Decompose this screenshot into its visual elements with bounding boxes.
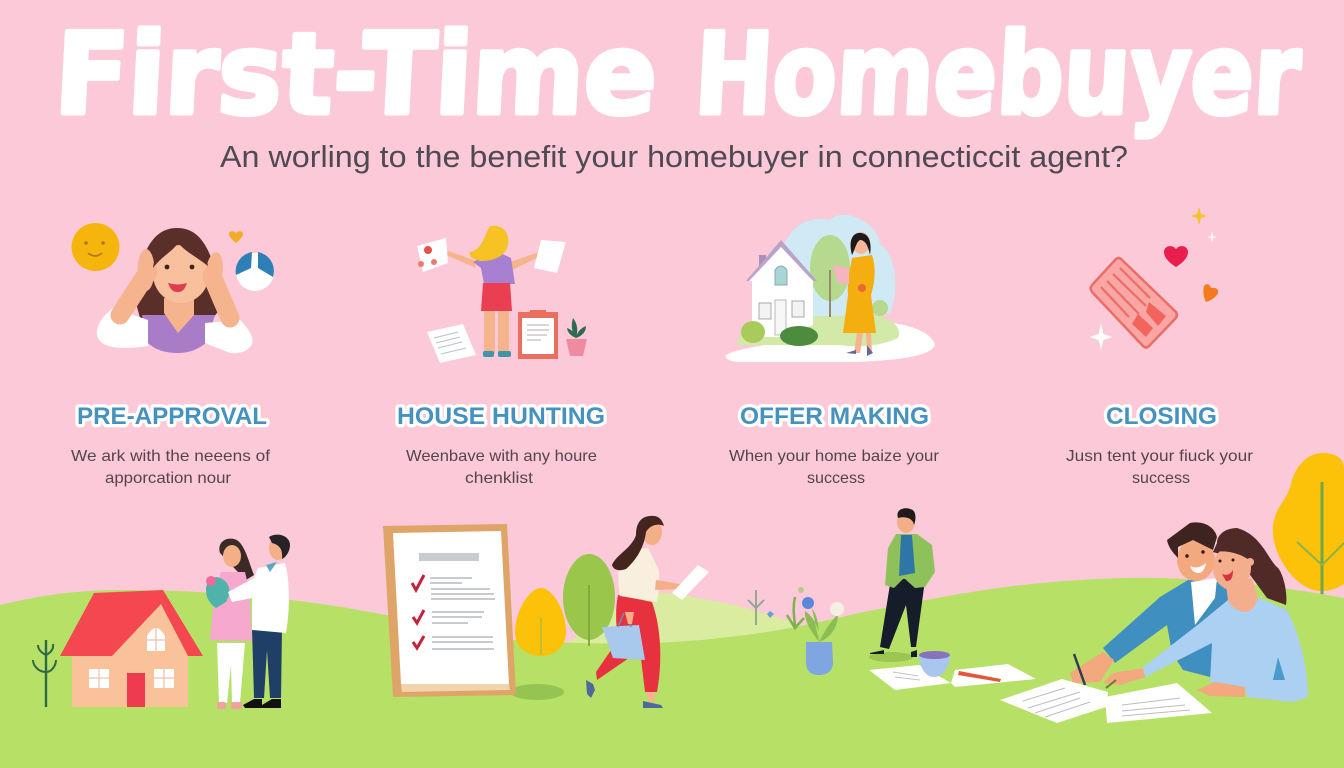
icon: red heart: [1164, 246, 1188, 267]
heading: house hunting: HOUSE HUNTING: [397, 403, 605, 430]
man: [1070, 522, 1233, 683]
text: pre-approval body: We ark with the neeens of: [71, 448, 271, 465]
icon: heart: [229, 231, 243, 243]
scene: standing man: [869, 508, 935, 662]
scene: couple with baby: [206, 535, 290, 709]
text: house hunting body: [406, 448, 597, 487]
text: offer making body: When your home baize your: [729, 448, 940, 465]
text: closing body: [1066, 448, 1254, 487]
scene: house: [33, 590, 203, 707]
illustration: woman and house: [726, 215, 935, 362]
panel: offer making: [726, 215, 940, 487]
heading: pre-approval: PRE-APPROVAL: [77, 403, 267, 430]
background: green ground: [0, 578, 1344, 768]
illustration: happy woman: [97, 228, 253, 353]
text: house hunting body: chenklist: [465, 470, 534, 487]
checklist lines: [430, 578, 495, 649]
text: house hunting body: Weenbave with any houre: [406, 448, 597, 465]
title: [52, 10, 1303, 140]
text: offer making body: [729, 448, 940, 487]
paper: held: [672, 565, 709, 600]
text: closing body: success: [1132, 470, 1190, 487]
panel: closing: [1066, 207, 1254, 487]
scene: table papers and bowl: [869, 651, 1036, 690]
icon: pie chart: [236, 252, 274, 291]
scene: walking woman: [586, 516, 709, 708]
pen: [1074, 654, 1085, 685]
heading: offer making: OFFER MAKING: [740, 403, 929, 430]
icon: gold sparkle: [1191, 207, 1207, 225]
big yellow tree: [1273, 453, 1344, 610]
plant: [566, 318, 587, 356]
text: offer making body: success: [807, 470, 865, 487]
text: pre-approval body: apporcation nour: [105, 470, 232, 487]
text: closing body: Jusn tent your fiuck your: [1066, 448, 1254, 465]
panel: pre-approval: [71, 223, 274, 487]
background: light hill: [560, 593, 800, 660]
scene: signing couple: [1000, 522, 1308, 723]
scene: checklist board: [383, 524, 564, 700]
title: First-Time: [52, 10, 660, 140]
icon: smiley: [72, 223, 120, 271]
paper: left: [1000, 679, 1108, 723]
panel: house hunting: [397, 226, 605, 487]
subtitle: An worling to the benefit your homebuyer in connecticcit agent?: [220, 139, 1128, 174]
icon: small white sparkle: [1207, 231, 1217, 243]
text: pre-approval body: [71, 448, 271, 487]
icon: large white sparkle: [1090, 323, 1112, 350]
scene: vase and plants: [748, 587, 844, 675]
woman: [1103, 528, 1308, 702]
paper: right: [534, 240, 566, 273]
clipboard: [518, 310, 558, 359]
checkmarks: [412, 575, 424, 648]
icon: ticket document: [1091, 258, 1177, 348]
paper: left: [417, 238, 448, 272]
document: [427, 324, 476, 363]
illustration: woman with papers: [417, 226, 587, 363]
scene: yellow and green trees: [515, 554, 615, 656]
heading: closing: CLOSING: [1106, 403, 1217, 430]
paper: right: [1105, 683, 1212, 723]
icon: orange heart: [1203, 284, 1218, 302]
